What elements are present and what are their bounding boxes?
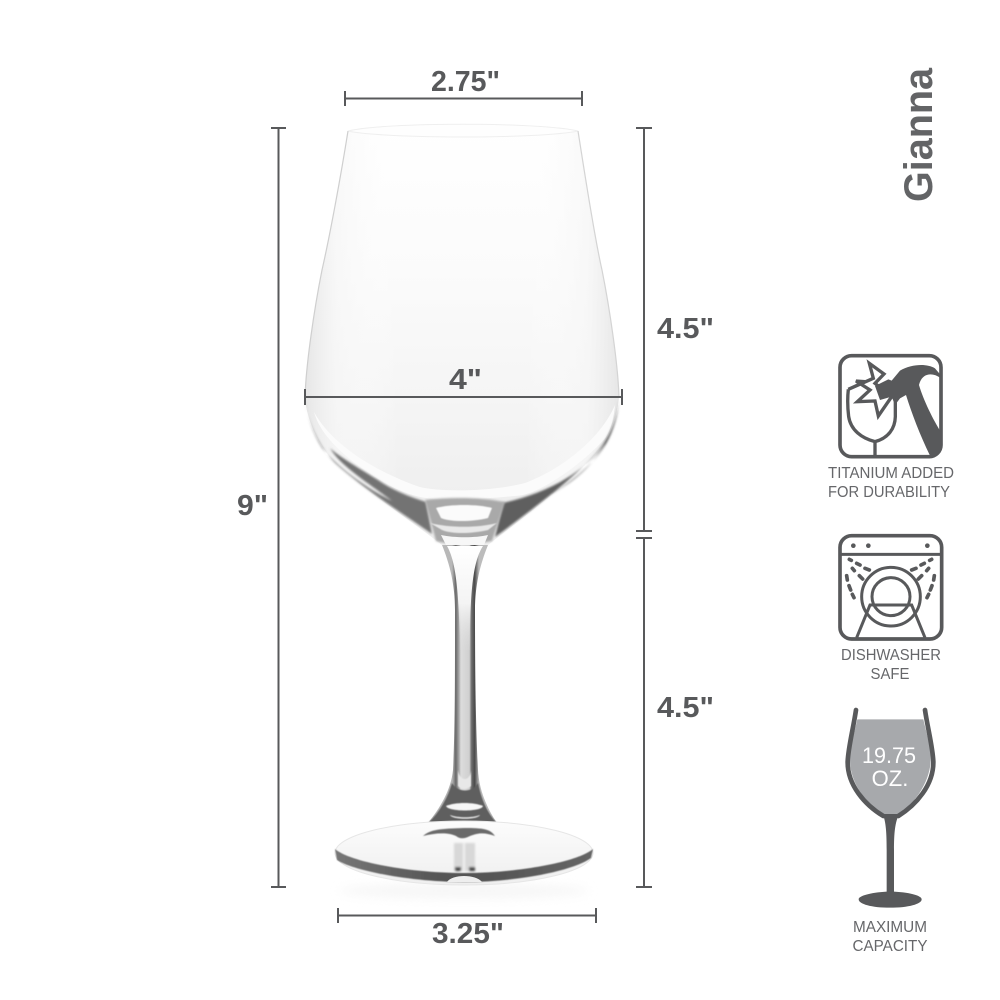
caption: MAXIMUM (853, 919, 927, 936)
dimension: bowl height 4.5 inches: 4.5" (657, 313, 714, 345)
bowl inner light surface (314, 405, 615, 499)
caption: TITANIUM ADDED (828, 465, 954, 482)
feature: titanium durability (828, 356, 954, 501)
dimension: stem height 4.5 inches: 4.5" (657, 692, 714, 724)
caption: DISHWASHER (841, 647, 941, 664)
feature: maximum capacity (848, 710, 933, 955)
dimension: stem height 4.5 inches (636, 538, 714, 887)
icon: dishwasher with plate (840, 536, 942, 639)
glass foot (335, 821, 593, 899)
wine glass photo (305, 124, 619, 899)
dimension: bowl width 4 inches (305, 364, 622, 405)
dimension: foot width 3.25 inches: 3.25" (432, 918, 504, 950)
dimension: total height 9 inches: 9" (237, 490, 268, 522)
dimension: rim width 2.75 inches (345, 66, 582, 106)
bowl base shading: left (305, 400, 432, 534)
capacity value: 19.75 (862, 743, 916, 768)
caption: SAFE (870, 666, 910, 683)
dimension: total height 9 inches (237, 128, 286, 887)
bowl base: centre cone (425, 498, 505, 544)
dimension: bowl width 4 inches: 4" (449, 364, 482, 396)
glass stem (428, 545, 497, 823)
title: Gianna: Gianna (897, 67, 941, 202)
feature: dishwasher safe (840, 536, 942, 683)
caption: CAPACITY (852, 938, 928, 955)
dimension: rim width 2.75 inches: 2.75" (431, 66, 500, 98)
glass bowl (305, 124, 619, 545)
dimension: bowl height 4.5 inches (636, 128, 714, 531)
caption: FOR DURABILITY (828, 484, 950, 501)
dimension: foot width 3.25 inches (338, 908, 596, 950)
icon: hammer breaking glass (840, 356, 941, 457)
capacity value: OZ. (872, 766, 908, 791)
icon: capacity glass (848, 710, 933, 908)
bowl base shading: right (495, 400, 619, 537)
